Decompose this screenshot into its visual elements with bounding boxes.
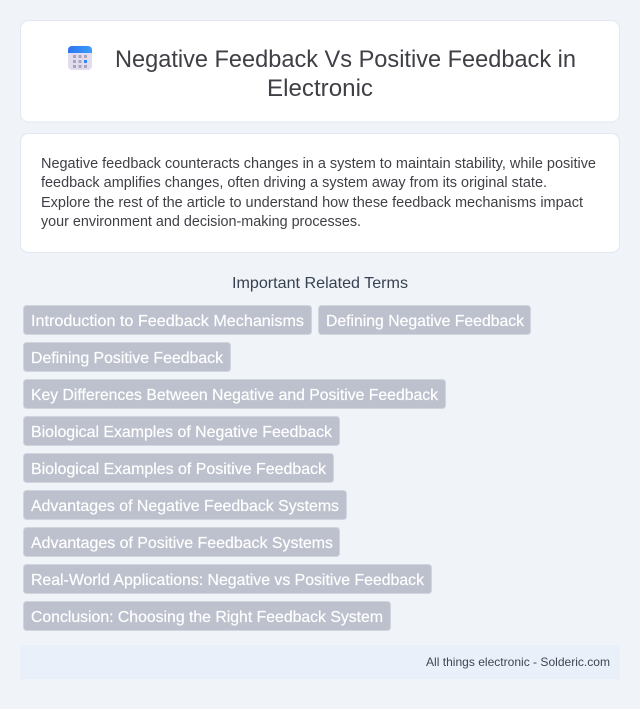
tag: Advantages of Negative Feedback Systems: [31, 498, 339, 515]
tag: Key Differences Between Negative and Positive Feedback: [31, 387, 439, 404]
intro text: your environment and decision-making processes.: [41, 214, 361, 230]
tag: [24, 342, 230, 372]
tag: [24, 602, 390, 630]
title: Negative Feedback Vs Positive Feedback in: [115, 46, 576, 73]
tag: Introduction to Feedback Mechanisms: [31, 313, 304, 330]
panel: title card: [20, 20, 620, 122]
panel: introduction: [20, 134, 620, 252]
tag: Defining Negative Feedback: [326, 313, 525, 330]
tag: Real-World Applications: Negative vs Positive Feedback: [31, 572, 425, 589]
tag: [24, 454, 334, 482]
tag: Defining Positive Feedback: [31, 350, 224, 367]
intro text: Negative feedback counteracts changes in a system to maintain stability, while positive: [41, 156, 596, 172]
title: [115, 46, 576, 102]
intro text: feedback amplifies changes, often driving a system away from its original state.: [41, 175, 547, 191]
tag: [318, 306, 530, 334]
tag: [24, 564, 432, 594]
tag list: [24, 306, 530, 630]
tag: Advantages of Positive Feedback Systems: [31, 535, 333, 552]
heading: important related terms: Important Related Terms: [232, 275, 408, 292]
intro text: [41, 156, 596, 230]
tag: [24, 380, 446, 408]
tag: [24, 416, 340, 446]
tag: [24, 490, 346, 520]
footer: [20, 645, 620, 679]
tag: [24, 306, 312, 334]
icon: calendar: [68, 46, 92, 70]
title: Electronic: [267, 75, 373, 102]
footer: All things electronic - Solderic.com: [426, 655, 610, 669]
intro text: Explore the rest of the article to understand how these feedback mechanisms impact: [41, 195, 583, 211]
tag: Biological Examples of Negative Feedback: [31, 424, 333, 441]
tag: Biological Examples of Positive Feedback: [31, 461, 327, 478]
tag: [24, 528, 340, 556]
tag: Conclusion: Choosing the Right Feedback System: [31, 609, 383, 626]
